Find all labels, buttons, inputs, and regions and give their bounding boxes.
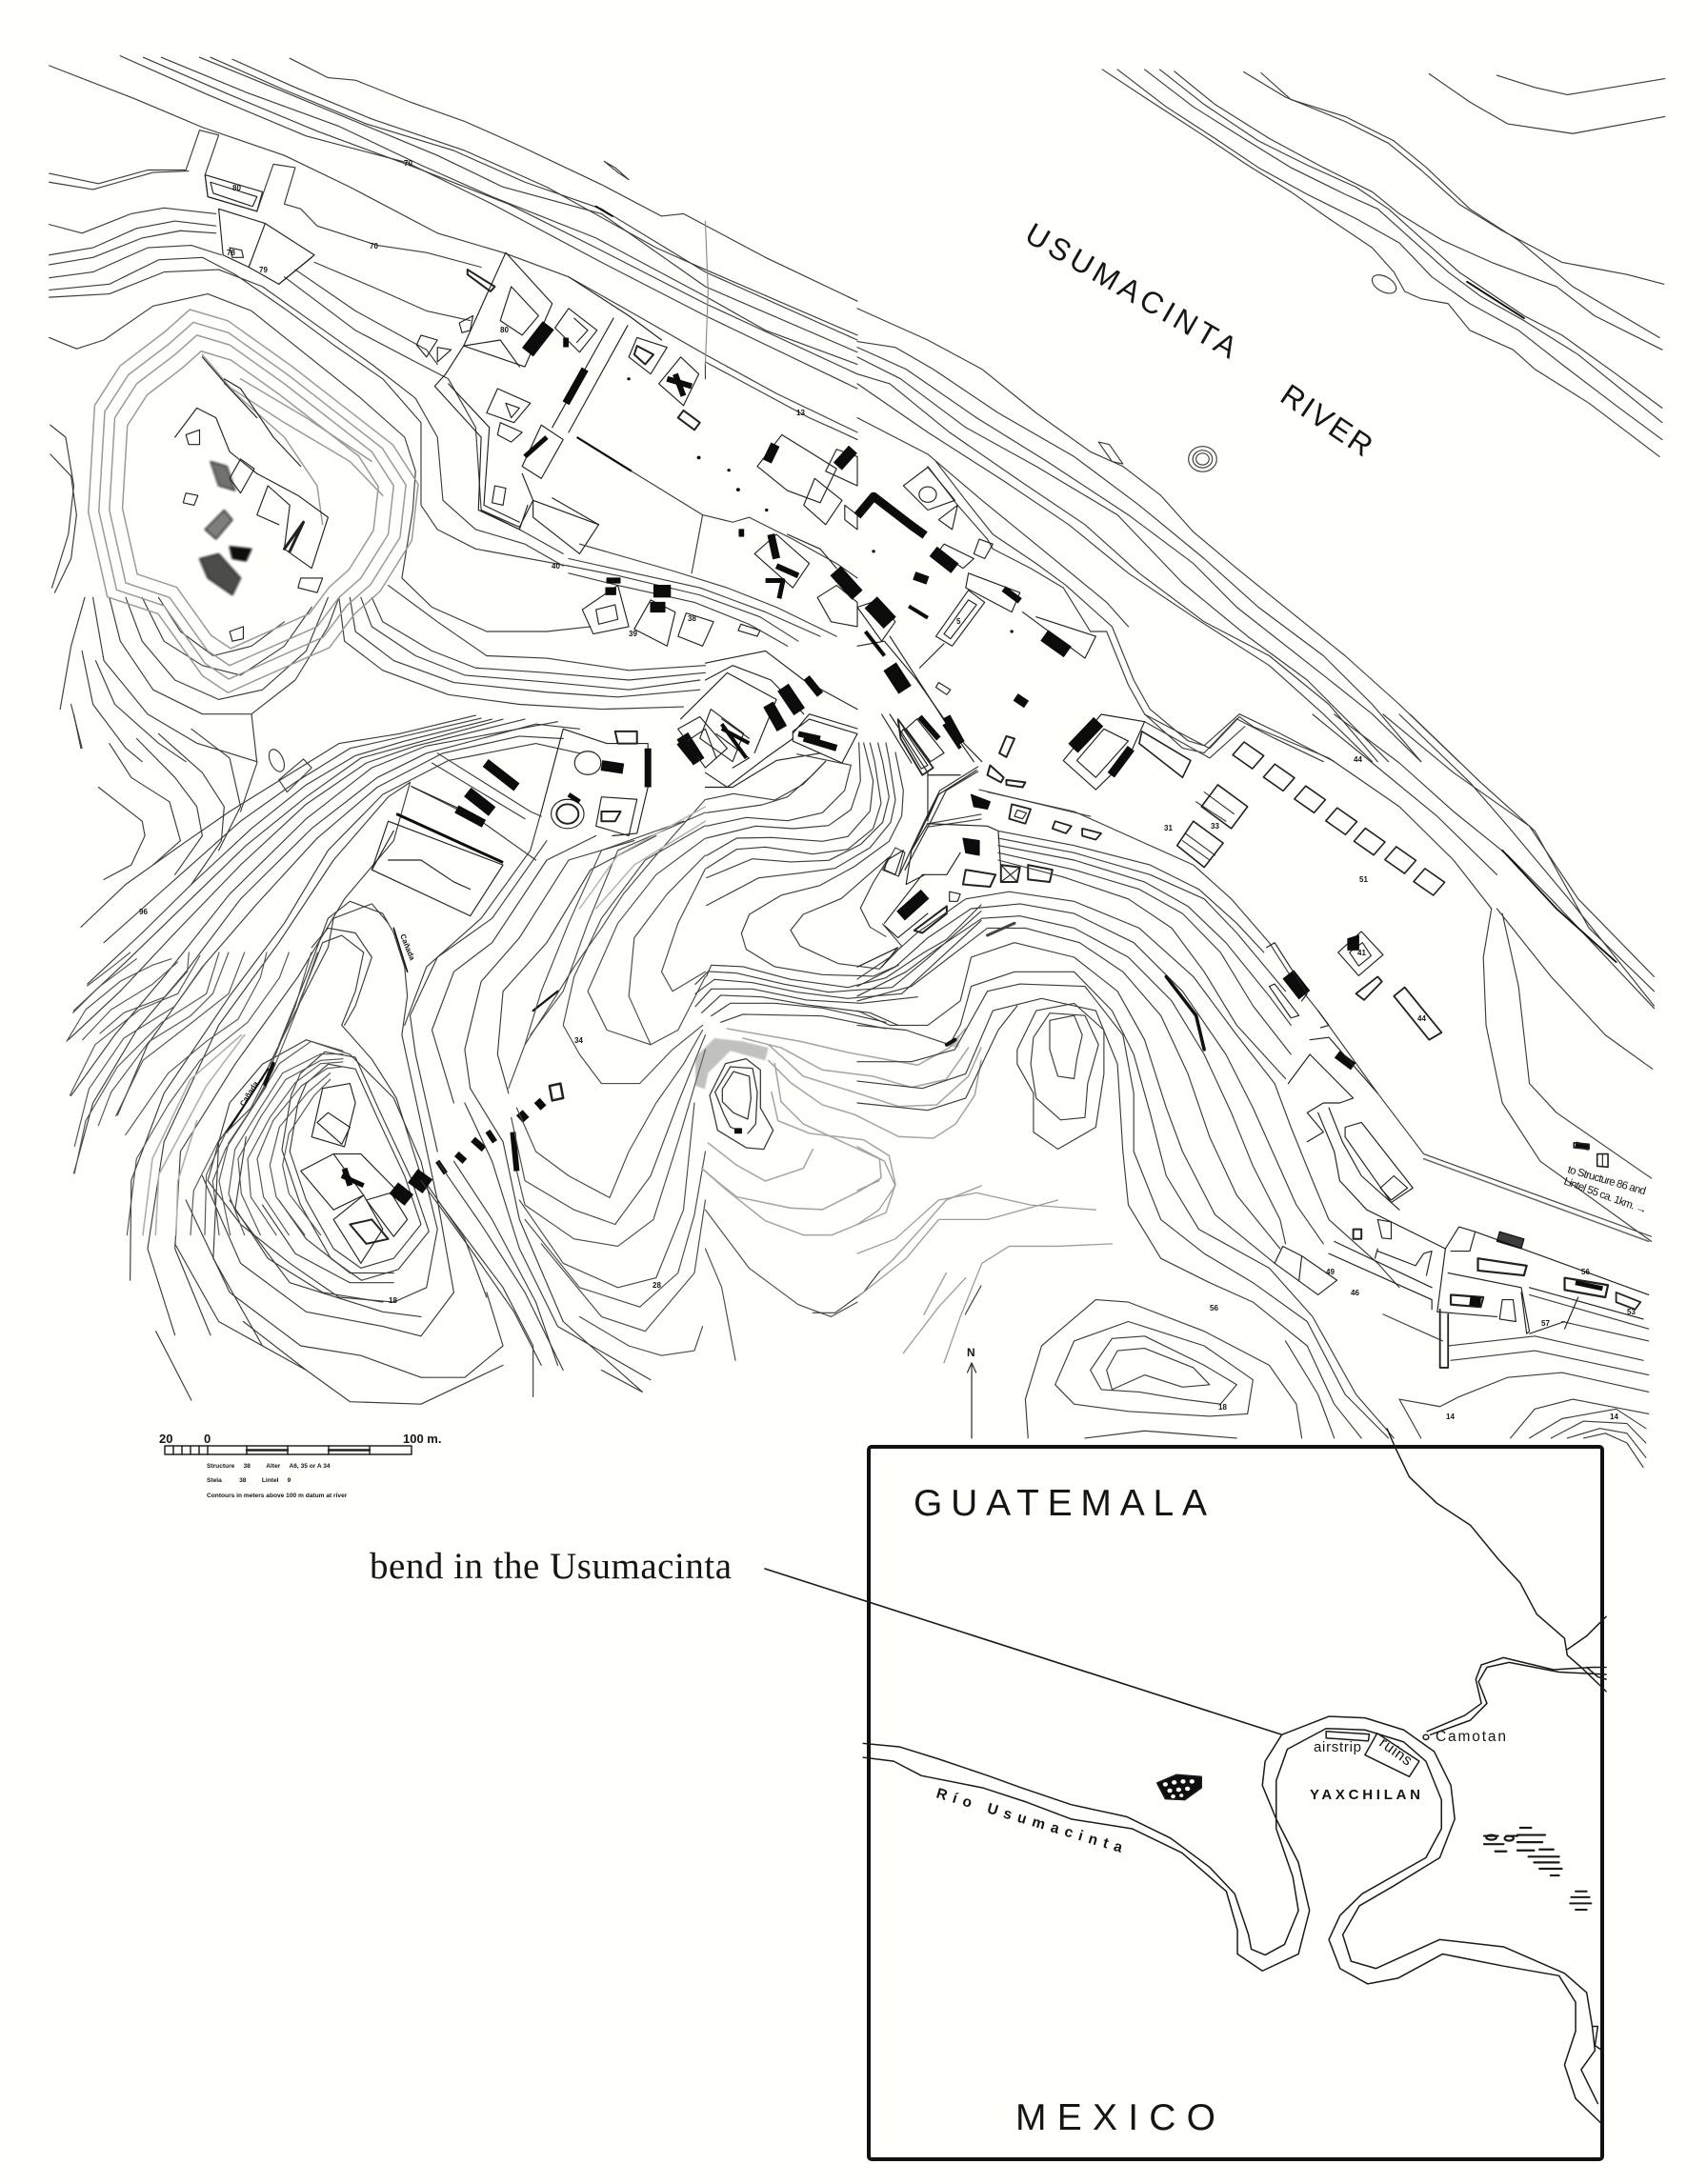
small structure number labels: 46 — [1351, 1289, 1359, 1297]
central plaza buildings, east — [857, 468, 1095, 762]
hatched lake — [1157, 1774, 1201, 1800]
long west slope lines — [67, 952, 317, 1235]
river name label — [1019, 216, 1379, 463]
scale numbers — [159, 1432, 441, 1446]
callout leader line — [765, 1569, 1281, 1734]
site plan map — [50, 56, 1665, 1467]
inset rivers and features — [863, 1429, 1606, 2123]
map: dense west slope of southern hill — [67, 952, 343, 1235]
swamp markings, small — [1570, 1892, 1591, 1910]
swamp markings, large — [1484, 1828, 1562, 1875]
smudged ground at the slope foot — [695, 1035, 959, 1089]
small structure number labels: 57 — [1541, 1319, 1550, 1328]
eastern river bank lines — [1253, 714, 1654, 1241]
pond shapes — [266, 748, 311, 792]
small structure number labels: 44 — [1417, 1014, 1426, 1023]
small structure number labels: 40 — [552, 562, 560, 571]
camotan settlement marker — [1423, 1734, 1429, 1739]
dark contour south — [813, 1272, 981, 1314]
small structure number labels: 78 — [227, 249, 235, 257]
small structure number labels: 5 — [956, 617, 961, 626]
central acropolis cluster — [681, 672, 857, 762]
scale numbers: 100 m. — [403, 1432, 441, 1446]
small structure number labels: 41 — [1357, 949, 1366, 957]
callout text: bend in the Usumacinta: bend in the Usumacinta — [370, 1546, 732, 1587]
river label: Rio Usumacinta: Río Usumacinta — [934, 1786, 1125, 1856]
note: to structure 86: Lintel 55 ca. 1km. → — [1562, 1176, 1649, 1216]
structures 52-57, south-east complex — [1275, 1143, 1649, 1368]
valley arches — [227, 901, 533, 1397]
inset map — [863, 1429, 1606, 2138]
scale legend text: Contours in meters above 100 m datum at river — [207, 1493, 348, 1499]
lower hill rings — [1025, 1300, 1335, 1438]
terrace contours south of road — [998, 831, 1291, 1078]
small structure number labels: 28 — [653, 1281, 661, 1290]
structure 34 compound — [541, 729, 716, 836]
central plaza buildings, north — [628, 378, 857, 627]
contours down the centre slope — [405, 753, 656, 1392]
structures 41-44 — [1267, 932, 1445, 1249]
west slope contours — [69, 714, 579, 1400]
small structure number labels: 49 — [1326, 1268, 1335, 1276]
tributary stream — [1427, 1657, 1606, 1732]
map: north-east quadrant river and structures — [857, 70, 1665, 762]
mid-river rock — [1189, 447, 1216, 471]
Rio Usumacinta south bank — [863, 1716, 1597, 2103]
small structure number labels: 39 — [629, 630, 637, 638]
country label: Mexico: MEXICO — [1015, 2097, 1215, 2138]
small structure number labels: 33 — [1211, 822, 1219, 831]
terrace contours below the acropolis — [707, 743, 981, 976]
airstrip outline — [1326, 1732, 1370, 1741]
scale legend text: Structure 38 Alter A6, 35 or A 34 — [207, 1463, 331, 1470]
bowl contours, central — [509, 799, 857, 1360]
west acropolis structures, blurred — [200, 461, 251, 595]
plaza walls — [569, 221, 857, 646]
north arrow letter: N — [967, 1346, 975, 1359]
country label: Guatemala: GUATEMALA — [914, 1483, 1207, 1524]
map: south-west quadrant contours — [69, 714, 857, 1404]
south bank lines — [857, 309, 1459, 762]
structure 33 — [1063, 714, 1145, 790]
hill contour rings, west face — [212, 1041, 343, 1235]
place label: ruins: ruins — [1376, 1734, 1415, 1770]
faded contours, lower left — [857, 1147, 1112, 1363]
faded slope lines — [143, 1035, 245, 1235]
main slope contours around the bend — [857, 892, 1399, 1438]
small structure number labels: 31 — [1164, 824, 1173, 832]
oblong court and ball-court structure — [372, 763, 516, 916]
southern hill ring contours — [175, 1040, 503, 1404]
island in the river — [1369, 271, 1400, 297]
ruins box — [1365, 1733, 1419, 1776]
east plaza wall and row of platforms — [979, 714, 1652, 1241]
great plaza west structures — [416, 252, 700, 553]
hilltop buildings — [301, 1084, 563, 1263]
west acropolis hill rings — [89, 310, 418, 692]
small structure number labels: 18 — [1218, 1403, 1227, 1412]
faded contours — [702, 1029, 981, 1314]
scale numbers: 0 — [204, 1432, 211, 1446]
river bank contour lines, west — [50, 56, 857, 432]
inset map frame — [869, 1447, 1602, 2159]
scale-side contour fragments — [601, 1370, 642, 1392]
structures 78-80 group — [205, 175, 314, 284]
scale graduated bar — [165, 1446, 412, 1454]
tributary stream, second bank — [1431, 1662, 1606, 1734]
small structure number labels: 79 — [259, 266, 268, 274]
small structure number labels: 18 — [389, 1296, 397, 1305]
river name label: USUMACINTA — [1019, 216, 1244, 365]
central acropolis base — [678, 717, 857, 787]
west contour lines — [50, 130, 705, 762]
site label: Yaxchilan: YAXCHILAN — [1310, 1787, 1420, 1803]
small structure number labels: 14 — [1610, 1413, 1618, 1421]
map: south-east quadrant contours and structures — [857, 714, 1654, 1467]
north arrow — [968, 1363, 976, 1438]
knoll rings — [710, 1059, 773, 1150]
small structure number labels: 38 — [688, 614, 696, 623]
map: knoll and faded contours south of the bend — [695, 1029, 981, 1314]
map: central slope between acropolis and bend — [695, 743, 981, 1029]
small structure number labels: 96 — [139, 908, 148, 916]
small structure number labels: 56 — [1581, 1268, 1590, 1276]
south-east contours — [1383, 1294, 1649, 1467]
small structure number labels — [139, 159, 1636, 1421]
faded contours west of bowl — [579, 807, 705, 909]
small structure number labels: 34 — [574, 1036, 583, 1045]
small structure number labels: 56 — [1210, 1304, 1218, 1312]
Rio Usumacinta north bank — [863, 1729, 1600, 2123]
place label: airstrip: airstrip — [1314, 1739, 1361, 1755]
sand bar — [1098, 442, 1123, 464]
lower contour band running to the bend — [695, 905, 981, 1029]
opposite bank lines — [1102, 70, 1665, 456]
small structure number labels: 44 — [1354, 755, 1362, 764]
scale numbers: 20 — [159, 1432, 172, 1446]
note: to structure 86: to Structure 86 and — [1566, 1164, 1647, 1197]
place label: Camotan: Camotan — [1436, 1729, 1506, 1745]
knoll rings — [1017, 1003, 1104, 1149]
river name label: RIVER — [1275, 377, 1379, 463]
scale legend text: Stela 38 Lintel 9 — [207, 1477, 291, 1484]
northern river line — [1387, 1429, 1606, 1692]
small structure number labels: Cañada — [398, 932, 417, 962]
small structure number labels: 14 — [1446, 1413, 1455, 1421]
small structure number labels: 70 — [404, 159, 412, 168]
scale legend text — [207, 1463, 348, 1499]
scale bar — [159, 1432, 441, 1499]
small structure number labels: 70 — [370, 242, 378, 250]
row of platforms — [1139, 731, 1445, 895]
west acropolis buildings — [175, 357, 328, 641]
small structure number labels: 13 — [796, 409, 805, 417]
river branch at frame — [1567, 1616, 1606, 2051]
west side of plaza, small buildings — [857, 714, 1101, 967]
map: north-west quadrant contours and structures — [50, 56, 857, 762]
small structure number labels: 80 — [232, 184, 241, 192]
structures 38-40 — [582, 578, 857, 714]
small structure number labels: Cañada — [238, 1079, 260, 1108]
small structure number labels: 51 — [1359, 875, 1368, 884]
small structure number labels: 80 — [500, 326, 509, 334]
small structure number labels: 53 — [1627, 1308, 1636, 1316]
